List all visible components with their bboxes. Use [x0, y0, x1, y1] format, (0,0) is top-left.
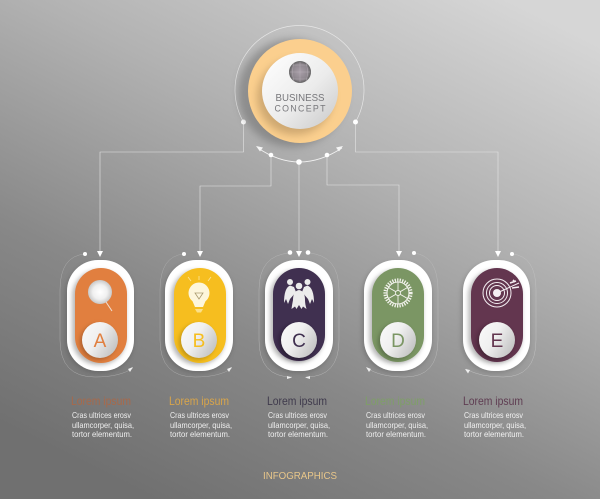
card E — [461, 251, 536, 377]
footer label: INFOGRAPHICS — [263, 470, 337, 482]
lower arc with arrows — [256, 146, 343, 165]
card E: E — [491, 331, 503, 352]
text block D: tortor elementum. — [366, 429, 426, 439]
text block A — [71, 394, 134, 439]
icon: magnifier — [88, 280, 112, 311]
text block C: Lorem ipsum — [267, 394, 327, 408]
card B — [160, 251, 233, 377]
orange ring — [248, 39, 352, 143]
text block C: Cras ultrices erosv — [268, 410, 328, 420]
orbit line A — [60, 254, 133, 377]
card D: D — [391, 331, 405, 352]
text block B: tortor elementum. — [170, 429, 230, 439]
text block E — [463, 394, 526, 439]
card C: C — [292, 331, 306, 352]
text block B: ullamcorper, quisa, — [170, 420, 232, 430]
globe icon — [289, 61, 311, 83]
card B: B — [193, 331, 205, 352]
text block A: ullamcorper, quisa, — [72, 420, 134, 430]
concept label — [274, 92, 326, 114]
text block E: ullamcorper, quisa, — [464, 420, 526, 430]
central concept badge — [235, 25, 364, 165]
text block A: Lorem ipsum — [71, 394, 131, 408]
text block C: tortor elementum. — [268, 429, 328, 439]
text block C — [267, 394, 330, 439]
text block A: Cras ultrices erosv — [72, 410, 132, 420]
connector nodes — [241, 120, 358, 124]
text block D: ullamcorper, quisa, — [366, 420, 428, 430]
white disc — [262, 53, 338, 129]
text block B — [169, 394, 232, 439]
text block A: tortor elementum. — [72, 429, 132, 439]
icon: gear — [385, 280, 411, 306]
card C — [259, 250, 339, 379]
outer arc — [235, 25, 364, 122]
connector lines — [100, 122, 498, 252]
text block B: Lorem ipsum — [169, 394, 229, 408]
text block B: Cras ultrices erosv — [170, 410, 230, 420]
text block D: Lorem ipsum — [365, 394, 425, 408]
concept label: BUSINESS — [276, 92, 324, 104]
concept label: CONCEPT — [274, 104, 326, 114]
text block E: tortor elementum. — [464, 429, 524, 439]
card A: A — [94, 331, 107, 352]
text block E: Lorem ipsum — [463, 394, 523, 408]
text block C: ullamcorper, quisa, — [268, 420, 330, 430]
icon: people group — [284, 279, 314, 309]
icon: light bulb — [188, 276, 211, 312]
card D — [362, 251, 438, 377]
text block E: Cras ultrices erosv — [464, 410, 524, 420]
text block D — [365, 394, 428, 439]
text block D: Cras ultrices erosv — [366, 410, 426, 420]
icon: target — [483, 279, 519, 307]
card A — [60, 251, 134, 377]
